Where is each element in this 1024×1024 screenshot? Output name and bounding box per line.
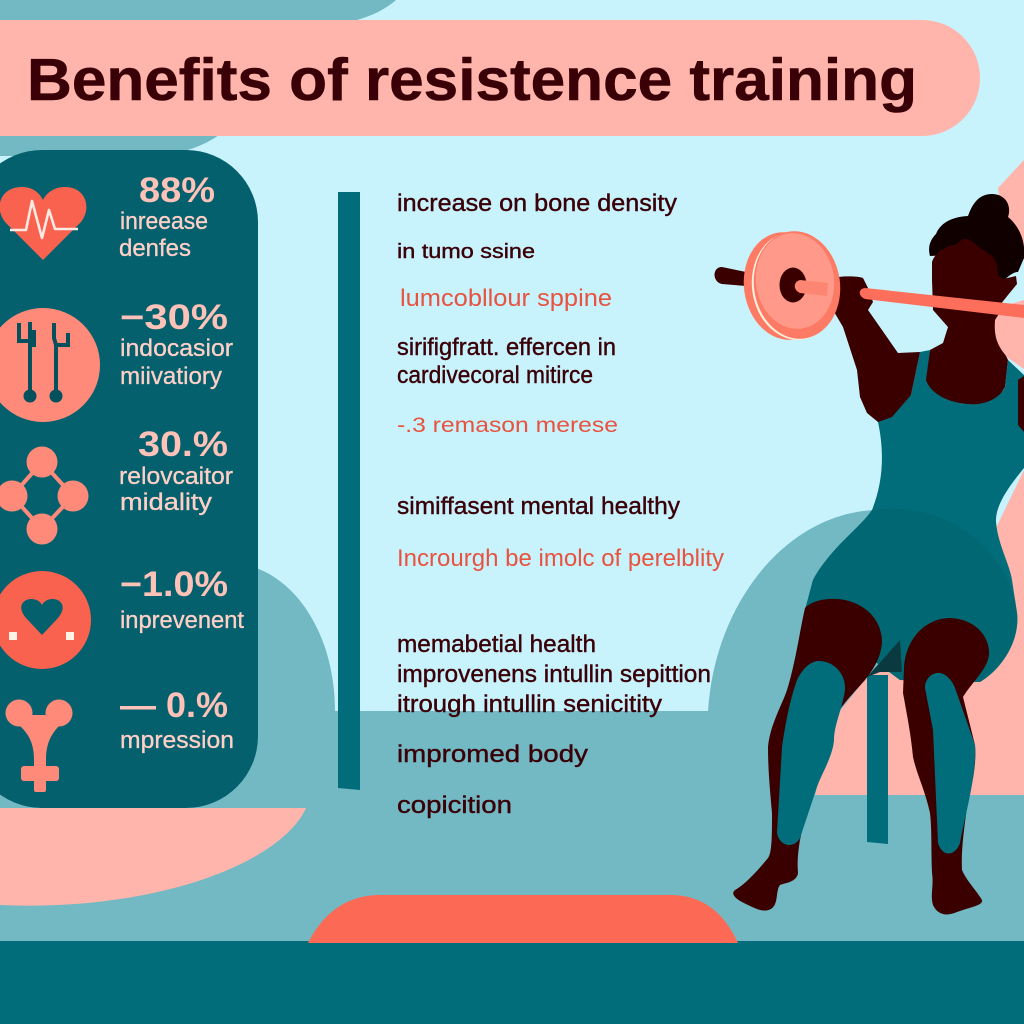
icon: heart with pulse <box>0 187 86 260</box>
hair <box>929 194 1024 281</box>
stool <box>867 675 888 844</box>
far arm sliver <box>1018 376 1024 432</box>
stat 5: mpression <box>120 727 234 754</box>
right shin <box>925 673 975 854</box>
figure: lifter with barbell <box>714 160 1024 914</box>
text list: benefits: memabetial health <box>397 631 596 658</box>
stat 3: relovcaitor <box>119 463 233 490</box>
left leg <box>733 599 882 911</box>
stat 3: 30.% <box>138 425 228 464</box>
icon: arteries circle <box>0 308 100 422</box>
icon: heart circle <box>0 571 91 669</box>
neck-side pink blob <box>995 300 1024 369</box>
text list: benefits: lumcobllour sppine <box>400 285 612 312</box>
stat 1: 88% <box>139 171 215 210</box>
upper pink blob behind hair <box>998 160 1024 260</box>
stat 5 <box>120 686 234 754</box>
icon: dumbbell figure <box>6 700 72 792</box>
title banner <box>0 20 980 136</box>
stat 5: — 0.% <box>120 686 228 725</box>
stat 4: −1.0% <box>120 565 228 604</box>
dress shaded overlap <box>805 509 1017 682</box>
text list: benefits: impromed body <box>397 741 588 768</box>
arm <box>826 276 920 422</box>
dress <box>805 350 1024 682</box>
text list: benefits: sirifigfratt. effercen in <box>397 334 616 361</box>
stat 3: midality <box>120 489 212 516</box>
text list: benefits: in tumo ssine <box>397 241 535 263</box>
text list: benefits: improvenens intullin sepittion <box>397 661 711 688</box>
text list: benefits <box>397 190 724 819</box>
title banner: Benefits of resistence training <box>27 47 917 113</box>
text list: benefits: Incrourgh be imolc of perelblity <box>397 545 724 572</box>
torso and head <box>925 239 1017 405</box>
text list: benefits: simiffasent mental healthy <box>397 493 680 520</box>
barbell bar <box>795 280 828 296</box>
stat 1: denfes <box>119 235 191 262</box>
panel: statistics <box>0 150 258 808</box>
stat 4 <box>120 565 244 634</box>
icon: molecule <box>0 446 88 544</box>
text list: benefits: itrough intullin senicitity <box>397 691 662 718</box>
stat 2: miivatiory <box>120 363 222 390</box>
stat 1: inreease <box>120 208 208 235</box>
stat 1 <box>119 171 215 262</box>
text list: benefits: increase on bone density <box>397 190 677 217</box>
barbell plate <box>737 226 847 345</box>
text list: benefits: -.3 remason merese <box>397 414 618 437</box>
text list: benefits: copicition <box>397 792 512 819</box>
vertical divider bar <box>338 192 360 790</box>
stat 4: inprevenent <box>120 607 244 634</box>
stat 3 <box>119 425 233 516</box>
stat 2: indocasior <box>120 335 233 362</box>
barbell sleeve <box>714 267 746 286</box>
left shin <box>777 661 845 845</box>
floor band <box>0 941 1024 1024</box>
text list: benefits: cardivecoral mitirce <box>397 362 593 389</box>
stat 2: −30% <box>120 298 228 337</box>
orange mat <box>308 895 738 943</box>
stool seat shadow <box>867 640 902 677</box>
right leg <box>903 618 989 914</box>
stat 2 <box>120 298 233 390</box>
